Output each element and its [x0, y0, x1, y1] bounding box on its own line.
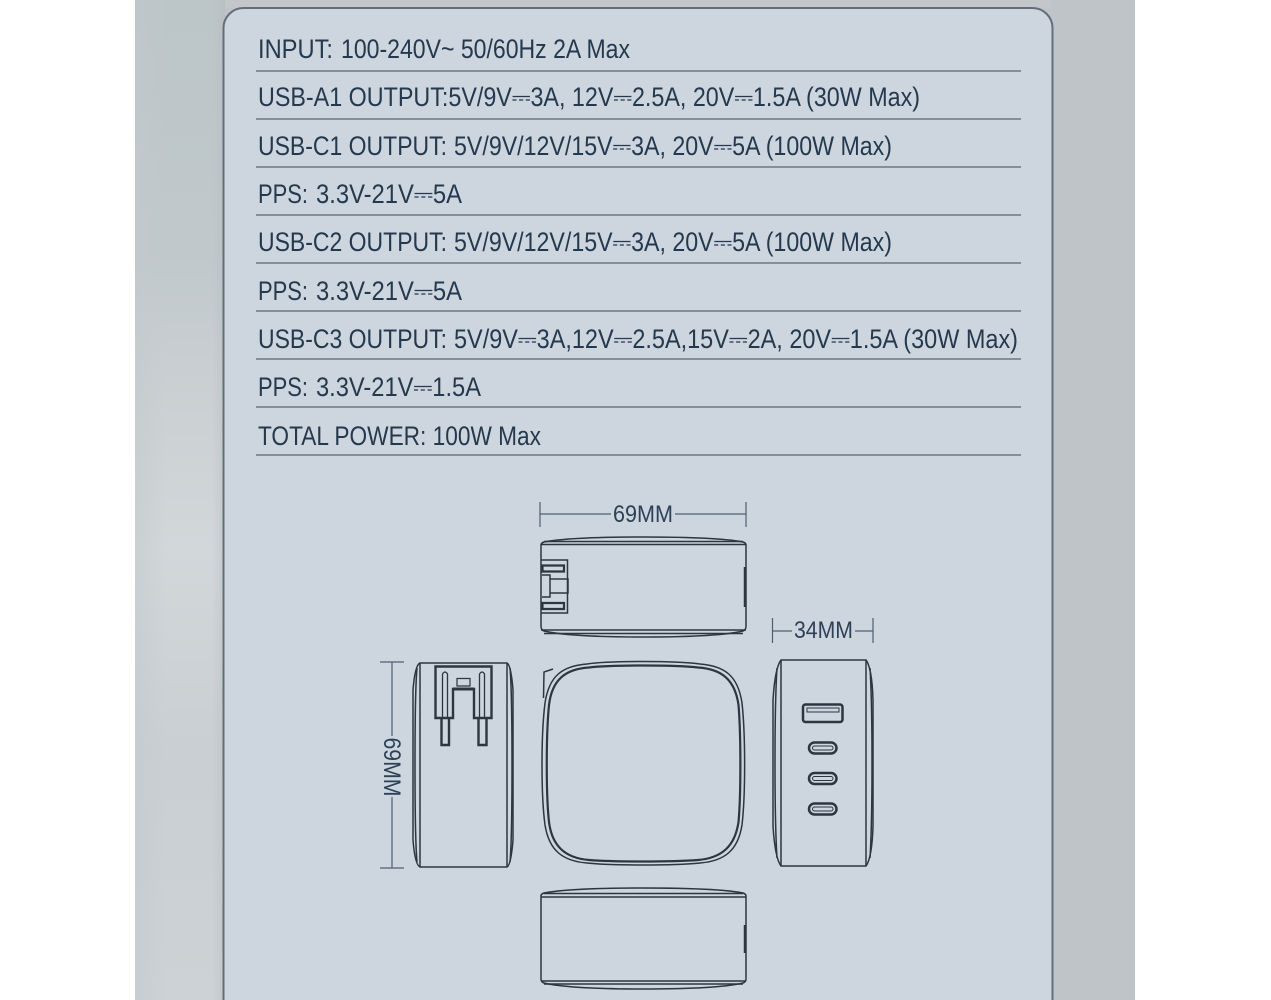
dimension: width 69MM: 69MM	[613, 501, 673, 528]
row: input: INPUT:	[258, 34, 333, 64]
row: USB-C1 output	[256, 131, 1021, 168]
icon: USB-C port 2	[809, 773, 836, 784]
row: USB-C2 output: USB-C2 OUTPUT:	[258, 227, 447, 257]
row: USB-C2 output: 5V/9V/12V/15V⎓3A, 20V⎓5A (100W Max)	[454, 227, 892, 257]
icon: USB-C port 1	[809, 742, 836, 754]
row: input: 100-240V~ 50/60Hz 2A Max	[341, 34, 630, 64]
panel: specifications card	[224, 8, 1052, 1000]
row: USB-C2 output	[256, 227, 1021, 264]
diagram: port-side view	[773, 660, 873, 866]
row: USB-C3 output: USB-C3 OUTPUT:	[258, 324, 447, 354]
dimension: height 69MM: 69MM	[378, 738, 405, 796]
spec rows	[256, 34, 1021, 456]
diagram: bottom view of charger	[541, 888, 746, 989]
dimension: width 69MM	[540, 501, 746, 528]
row: USB-C3 PPS	[256, 372, 1021, 408]
row: USB-C3 output: 5V/9V⎓3A,12V⎓2.5A,15V⎓2A, 20V⎓1.5A (30W Max)	[454, 324, 1018, 354]
row: USB-A1 output: USB-A1 OUTPUT:5V/9V⎓3A, 12V⎓2.5A, 20V⎓1.5A (30W Max)	[258, 82, 920, 112]
row: USB-C1 PPS: PPS:	[258, 179, 308, 209]
row: USB-C3 PPS: PPS:	[258, 372, 308, 402]
background plate	[135, 0, 1135, 1000]
dimension: height 69MM	[378, 662, 405, 868]
icon: USB-A port	[803, 704, 842, 722]
row: USB-C2 PPS	[256, 276, 1021, 312]
diagram: front view of charger	[542, 662, 745, 865]
row: USB-C2 PPS: 3.3V-21V⎓5A	[316, 276, 462, 306]
row: USB-C3 output	[256, 324, 1021, 360]
row: USB-C1 PPS: 3.3V-21V⎓5A	[316, 179, 462, 209]
row: USB-C2 PPS: PPS:	[258, 276, 308, 306]
row: USB-C3 PPS: 3.3V-21V⎓1.5A	[316, 372, 481, 402]
icon: USB-C port 3	[809, 804, 836, 814]
row: USB-C1 output: 5V/9V/12V/15V⎓3A, 20V⎓5A (100W Max)	[454, 131, 892, 161]
diagram: side view with folding plug	[413, 663, 513, 867]
diagram: top view of charger	[541, 537, 746, 637]
dimension: depth 34MM: 34MM	[794, 617, 853, 644]
dimension: depth 34MM	[772, 617, 873, 644]
row: input	[256, 34, 1021, 72]
row: USB-C1 PPS	[256, 179, 1021, 216]
row: total power: TOTAL POWER: 100W Max	[258, 421, 541, 451]
row: USB-C1 output: USB-C1 OUTPUT:	[258, 131, 447, 161]
